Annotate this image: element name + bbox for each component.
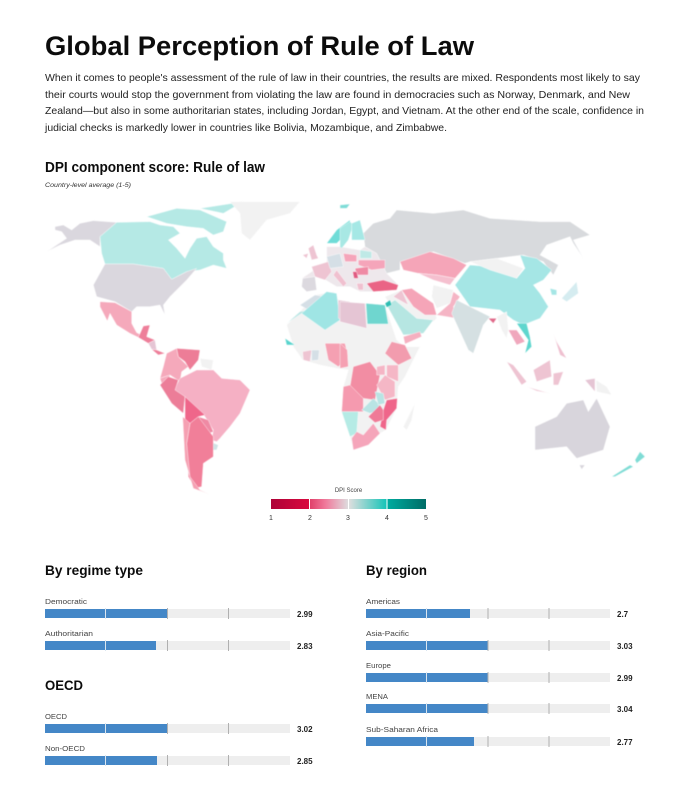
bar: Authoritarian [45,629,313,651]
heading: OECD: OECD [45,678,83,693]
bar: MENA: MENA [366,692,389,701]
heading: by regime type: By regime type [45,563,143,578]
bar: Asia-Pacific: 3.03 [617,642,633,651]
bar: Democratic: Democratic [45,597,87,606]
intro text block [44,73,644,134]
intro text block: Zealand—but also in some authoritarian states, including Jordan, Egypt, and Vietnam. At the other end of the scale, confidence in [45,106,644,117]
legend: DPI score: DPI Score [335,488,363,494]
bar: Europe: Europe [366,661,391,670]
bar: MENA: 3.04 [617,705,633,714]
bar: Americas: 2.7 [617,610,629,619]
bar: OECD: 3.02 [297,725,313,734]
bar: Non-OECD: 2.85 [297,757,313,766]
map heading: DPI component score: Rule of law [45,160,266,176]
bar: Non-OECD: Non-OECD [45,744,86,753]
bar: Americas: Americas [366,597,400,606]
map: Europe, Africa, Asia and Oceania [340,204,645,477]
bar: OECD [45,712,313,734]
bar: Authoritarian: Authoritarian [45,629,93,638]
bar: Sub-Saharan Africa: Sub-Saharan Africa [366,725,439,734]
intro text block: judicial checks is markedly lower in countries like Bolivia, Mozambique, and Zimbabwe. [44,123,447,134]
legend: DPI score [269,488,428,522]
bar: Europe: 2.99 [617,674,633,683]
map: base landmasses [287,247,437,450]
bar: OECD: OECD [45,712,68,721]
legend: DPI score: 4 [385,515,389,522]
map subtitle: Country-level average (1-5) [45,183,131,189]
world map [47,202,645,494]
heading: by region: By region [366,563,427,578]
map: Americas and west Africa [47,202,350,494]
bar: Sub-Saharan Africa [366,725,633,747]
bar: Americas [366,597,629,619]
bar: MENA [366,692,633,714]
bar: Democratic [45,597,313,619]
legend: DPI score: 5 [424,515,428,522]
bar: Non-OECD [45,744,313,766]
bar: Democratic: 2.99 [297,610,313,619]
legend: DPI score: 3 [346,515,350,522]
legend: DPI score: 2 [308,515,312,522]
bar: Sub-Saharan Africa: 2.77 [617,738,633,747]
title: Global Perception of Rule of Law [45,31,475,61]
intro text block: their courts would stop the government from violating the law are found in democracies such as Norway, Denmark, and New [45,90,631,101]
bar: Asia-Pacific: Asia-Pacific [366,629,409,638]
intro text block: When it comes to people's assessment of the rule of law in their countries, the results are mixed. Respondents most likely to say [45,73,641,84]
legend: DPI score: 1 [269,515,273,522]
bar: Asia-Pacific [366,629,633,651]
bar: Authoritarian: 2.83 [297,642,313,651]
bar: Europe [366,661,633,683]
